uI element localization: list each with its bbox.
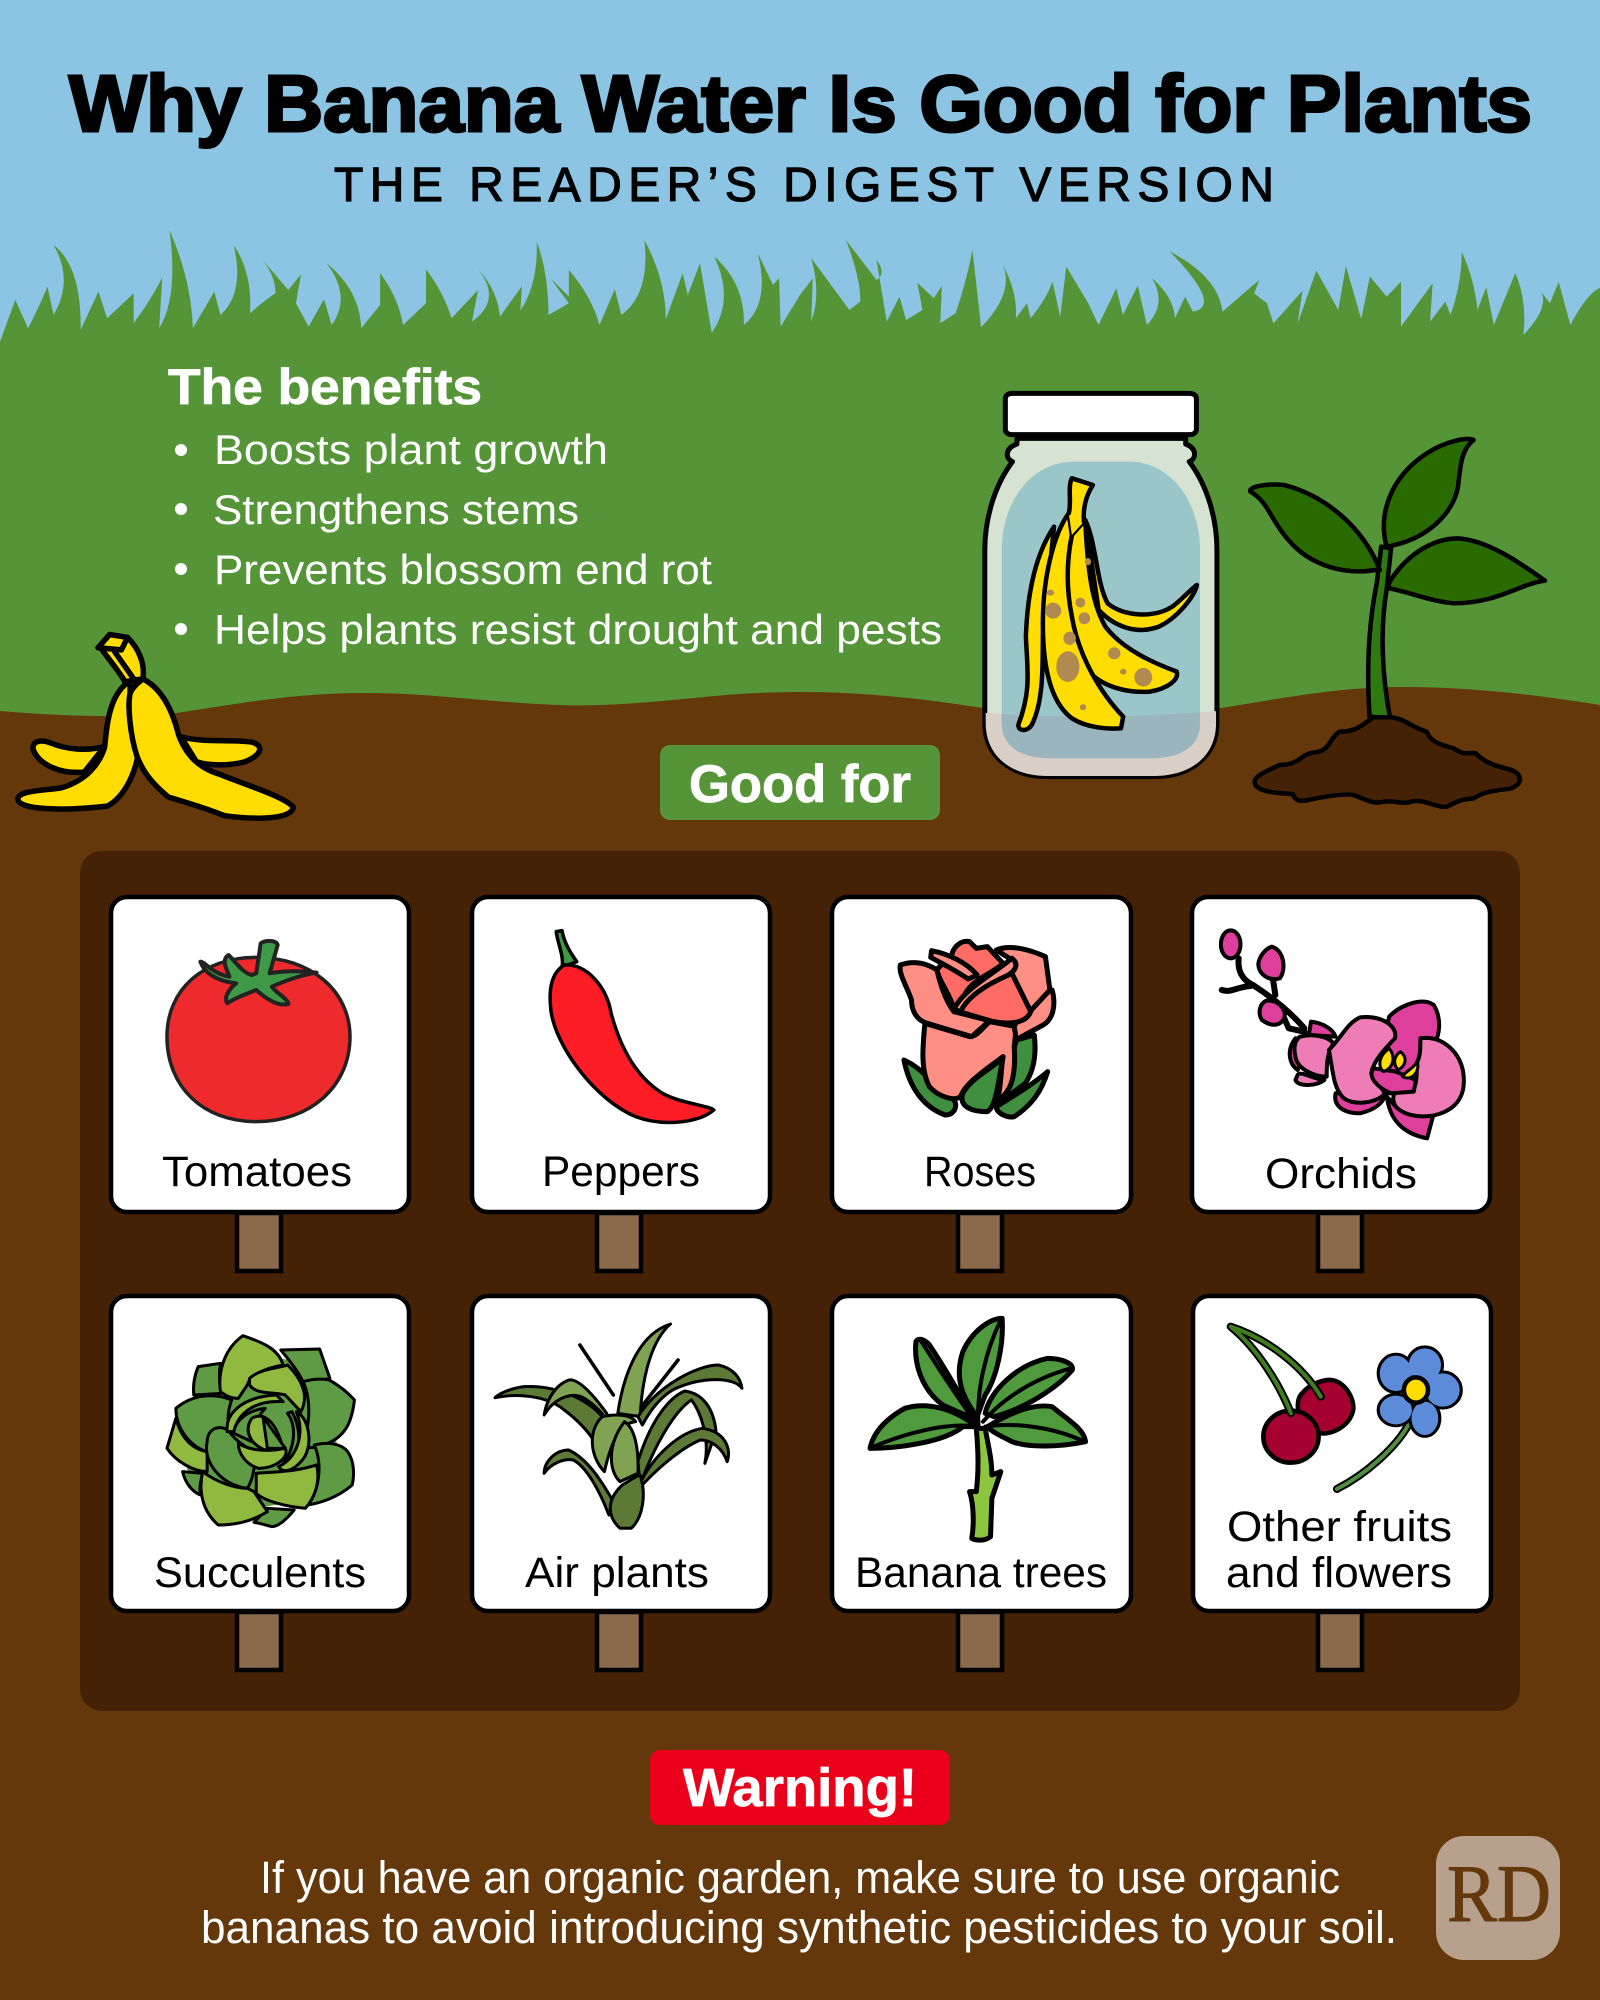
sign: roses: Roses (924, 1148, 1036, 1196)
warning text: If you have an organic garden, make sure to use organic (260, 1852, 1340, 1903)
panel: good for plants (80, 851, 1520, 1711)
sign: peppers: Peppers (542, 1148, 700, 1196)
badge: good for: Good for (689, 755, 911, 814)
sign: banana trees: Banana trees (855, 1549, 1107, 1597)
sign: orchids: Orchids (1265, 1150, 1417, 1198)
badge: good for (660, 745, 940, 820)
benefit: drought and pests: Helps plants resist drought and pests (214, 606, 942, 653)
sign: banana trees (832, 1296, 1131, 1670)
sign: roses (832, 897, 1131, 1271)
soil ground (0, 687, 1600, 2000)
benefits heading: The benefits (168, 359, 482, 415)
badge: warning: Warning! (683, 1758, 917, 1818)
sign: other fruits and flowers: and flowers (1226, 1549, 1452, 1597)
grass (0, 230, 1600, 740)
icon: banana peel (18, 635, 293, 818)
benefit: plant growth: Boosts plant growth (214, 426, 608, 473)
sign: succulents (111, 1296, 409, 1670)
warning text: bananas to avoid introducing synthetic pesticides to your soil. (201, 1902, 1397, 1953)
sign: tomatoes (111, 897, 409, 1271)
warning text (201, 1852, 1397, 1953)
sign: air plants: Air plants (525, 1549, 709, 1597)
sign: other fruits and flowers: Other fruits (1227, 1503, 1452, 1551)
sign: orchids (1192, 897, 1490, 1271)
title: Why Banana Water Is Good for Plants (69, 59, 1532, 148)
sign: air plants (472, 1296, 770, 1670)
badge: warning (650, 1750, 950, 1825)
benefit: blossom end rot: Prevents blossom end rot (214, 546, 712, 593)
logo: RD (1436, 1836, 1560, 1960)
logo: RD: RD (1447, 1848, 1551, 1939)
icon: seedling in soil (1250, 439, 1545, 807)
panel: benefits (168, 359, 942, 653)
benefit: stems: Strengthens stems (213, 486, 579, 533)
sign: other fruits and flowers (1193, 1296, 1491, 1670)
subtitle: THE READER’S DIGEST VERSION (334, 159, 1274, 212)
sky background (0, 0, 1600, 360)
sign: succulents: Succulents (154, 1549, 366, 1597)
icon: jar with banana peel (985, 393, 1217, 777)
sign: tomatoes: Tomatoes (162, 1148, 352, 1196)
sign: peppers (472, 897, 770, 1271)
